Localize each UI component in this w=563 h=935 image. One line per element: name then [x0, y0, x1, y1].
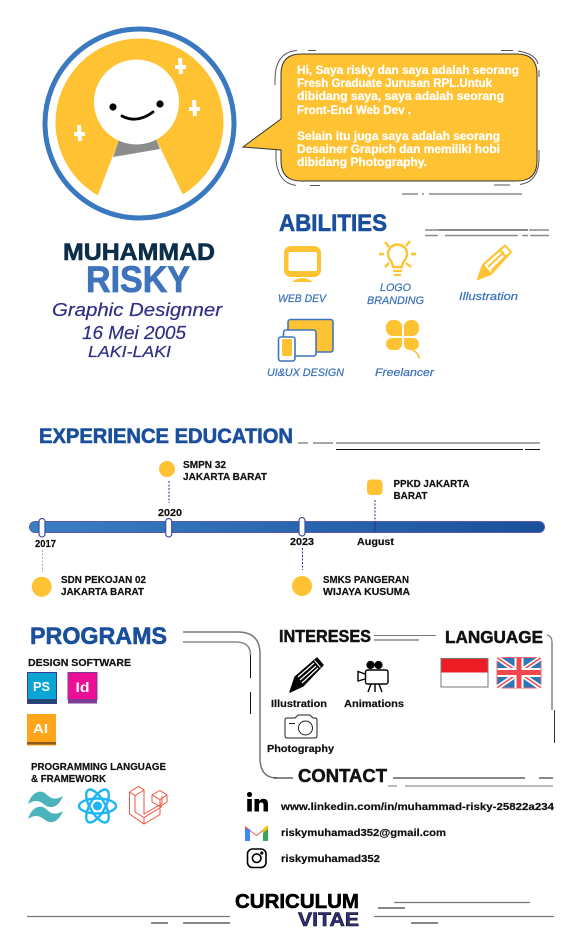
icon: indonesia flag — [441, 658, 488, 687]
speech bubble — [243, 50, 539, 186]
label: logo branding: LOGO — [380, 282, 411, 294]
milestone: SMKS — [292, 575, 410, 598]
icon: laravel — [130, 786, 167, 824]
footer title: VITAE — [298, 910, 359, 931]
milestone: SMKS: SMKS PANGERAN — [323, 575, 409, 586]
panel: interests — [267, 626, 404, 755]
timeline bar — [30, 522, 544, 532]
experience heading: EXPERIENCE EDUCATION — [39, 425, 293, 448]
label: illustration: Illustration — [271, 699, 327, 710]
name block: RISKY — [86, 259, 190, 300]
icon: photo camera — [285, 715, 317, 738]
panel: abilities — [267, 241, 518, 379]
footer title: CURICULUM — [235, 890, 359, 913]
icon: clover — [386, 320, 420, 358]
milestone: SMPN 32: SMPN 32 — [183, 460, 226, 471]
milestone: PPKD: BARAT — [394, 491, 428, 502]
icon: tailwind — [28, 792, 63, 822]
heading: LANGUAGE — [445, 627, 543, 647]
bubble text: Front-End Web Dev . — [297, 105, 411, 117]
label: photography: Photography — [267, 744, 334, 755]
milestone: SMKS: WIJAYA KUSUMA — [323, 587, 410, 598]
name block: 16 Mei 2005 — [82, 323, 187, 343]
label: web dev: WEB DEV — [278, 293, 328, 305]
bubble text: Desainer Grapich dan memiliki hobi — [297, 144, 500, 156]
milestone: SDN: SDN PEKOJAN 02 — [61, 575, 146, 586]
name block: MUHAMMAD — [63, 239, 215, 266]
instagram handle: riskymuhamad352 — [281, 854, 380, 865]
avatar portrait — [45, 29, 234, 218]
bubble text: dibidang Photography. — [297, 157, 427, 169]
name block: Graphic Designner — [52, 300, 223, 320]
heading: INTERESES — [279, 626, 371, 646]
milestone: PPKD — [367, 479, 470, 502]
year labels: 2023 — [290, 537, 314, 548]
frame lines — [183, 632, 554, 778]
programs heading: PROGRAMS — [30, 623, 167, 650]
year markers — [39, 518, 305, 537]
subheading: & FRAMEWORK — [31, 774, 107, 785]
icon: uk flag — [497, 658, 541, 688]
icon: pencil — [478, 246, 511, 279]
milestone: PPKD: PPKD JAKARTA — [394, 479, 470, 490]
bubble text — [297, 65, 519, 169]
icon: indesign: Id — [76, 679, 90, 695]
bubble text: Hi, Saya risky dan saya adalah seorang — [297, 65, 519, 77]
connector lines — [42, 481, 375, 572]
bubble text: Fresh Graduate Jurusan RPL.Untuk — [297, 78, 493, 90]
milestone: SMPN 32: JAKARTA BARAT — [183, 472, 267, 483]
icon: photoshop: PS — [33, 679, 50, 694]
year labels: 2020 — [158, 508, 182, 519]
year labels — [35, 508, 395, 550]
name block — [52, 239, 223, 361]
subheading: PROGRAMMING LANGUAGE — [31, 762, 166, 773]
icon: light bulb — [379, 241, 416, 275]
year labels: August — [357, 537, 395, 548]
milestone: SMPN 32 — [159, 460, 267, 483]
label: logo branding: BRANDING — [367, 295, 424, 307]
label: ui ux design: UI&UX DESIGN — [267, 367, 344, 379]
link text: www.linkedin.com/in/muhammad-risky-25822a234 — [280, 802, 555, 813]
icon: instagram — [248, 849, 266, 868]
label: animations: Animations — [344, 699, 404, 710]
email text: riskymuhamad352@gmail.com — [281, 828, 446, 839]
icon: illustrator: AI — [33, 721, 48, 736]
panel: contact — [245, 792, 555, 868]
panel: language — [441, 627, 543, 688]
icon: black pencil — [290, 658, 323, 692]
icon: gmail — [245, 825, 268, 841]
subheading: DESIGN SOFTWARE — [28, 658, 131, 669]
footer title — [235, 890, 359, 931]
panel: design software — [27, 658, 131, 746]
contact heading: CONTACT — [298, 765, 388, 786]
abilities heading: ABILITIES — [279, 210, 387, 237]
icon: devices — [278, 320, 333, 361]
milestone: SDN — [32, 575, 146, 598]
label: freelancer: Freelancer — [375, 367, 435, 379]
year labels: 2017 — [35, 539, 56, 550]
icon: monitor — [284, 246, 321, 282]
bubble text: dibidang saya, saya adalah seorang — [297, 91, 504, 103]
panel: programming — [28, 762, 167, 826]
subheading — [31, 762, 166, 785]
label: illustration: Illustration — [459, 291, 518, 303]
label: logo branding — [367, 282, 424, 307]
bubble text: Selain itu juga saya adalah seorang — [297, 131, 500, 143]
name block: LAKI-LAKI — [88, 344, 172, 361]
icon: react — [79, 786, 116, 826]
timeline — [30, 460, 544, 598]
icon: linkedin — [247, 792, 268, 812]
milestone: SDN: JAKARTA BARAT — [61, 587, 144, 598]
icon: movie camera — [358, 662, 388, 692]
